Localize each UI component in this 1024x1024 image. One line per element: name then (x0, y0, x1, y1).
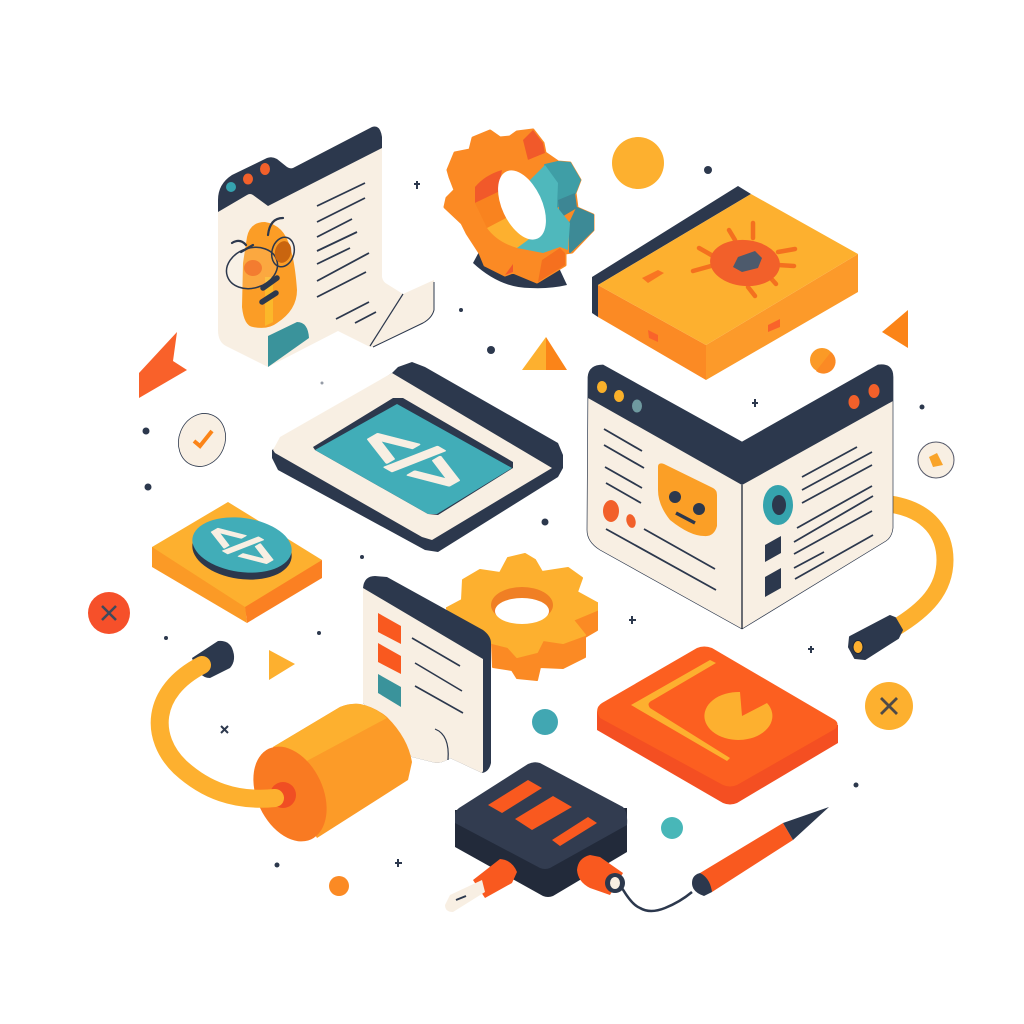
code symbol on tablet: </> (338, 416, 490, 503)
icon: orange and teal gear, top (445, 130, 593, 288)
browser window, large open book (587, 365, 893, 629)
plug and wire, right (577, 855, 692, 911)
yellow code block, left (152, 502, 322, 623)
teal dot (532, 709, 558, 735)
yellow cable with plug, right (849, 504, 945, 659)
code symbol on block: </> (191, 516, 294, 575)
document with face, top left (218, 126, 434, 367)
decorative circle, top (612, 137, 664, 189)
orange dot lower (329, 876, 349, 896)
yellow gear, centre (447, 554, 597, 680)
red arrow, left (139, 332, 187, 398)
probe plug, left (445, 859, 517, 912)
arrow triangle, top right (882, 310, 908, 348)
triangle pyramid (522, 337, 567, 370)
document with list (363, 576, 491, 773)
small badge, right (918, 442, 954, 478)
pen (692, 807, 829, 896)
yellow close badge (865, 682, 913, 730)
red close badge (88, 592, 130, 634)
cable with cylinder, bottom left (160, 641, 412, 853)
small orange ball (810, 348, 836, 374)
box with bug icon, top right (592, 186, 858, 380)
red chart tile (597, 646, 838, 804)
scattered particles (142, 166, 924, 868)
check badge (171, 406, 233, 474)
triangle play (269, 650, 295, 680)
dark connector box (455, 762, 627, 897)
teal dot lower (661, 817, 683, 839)
tablet with code screen (272, 362, 563, 552)
